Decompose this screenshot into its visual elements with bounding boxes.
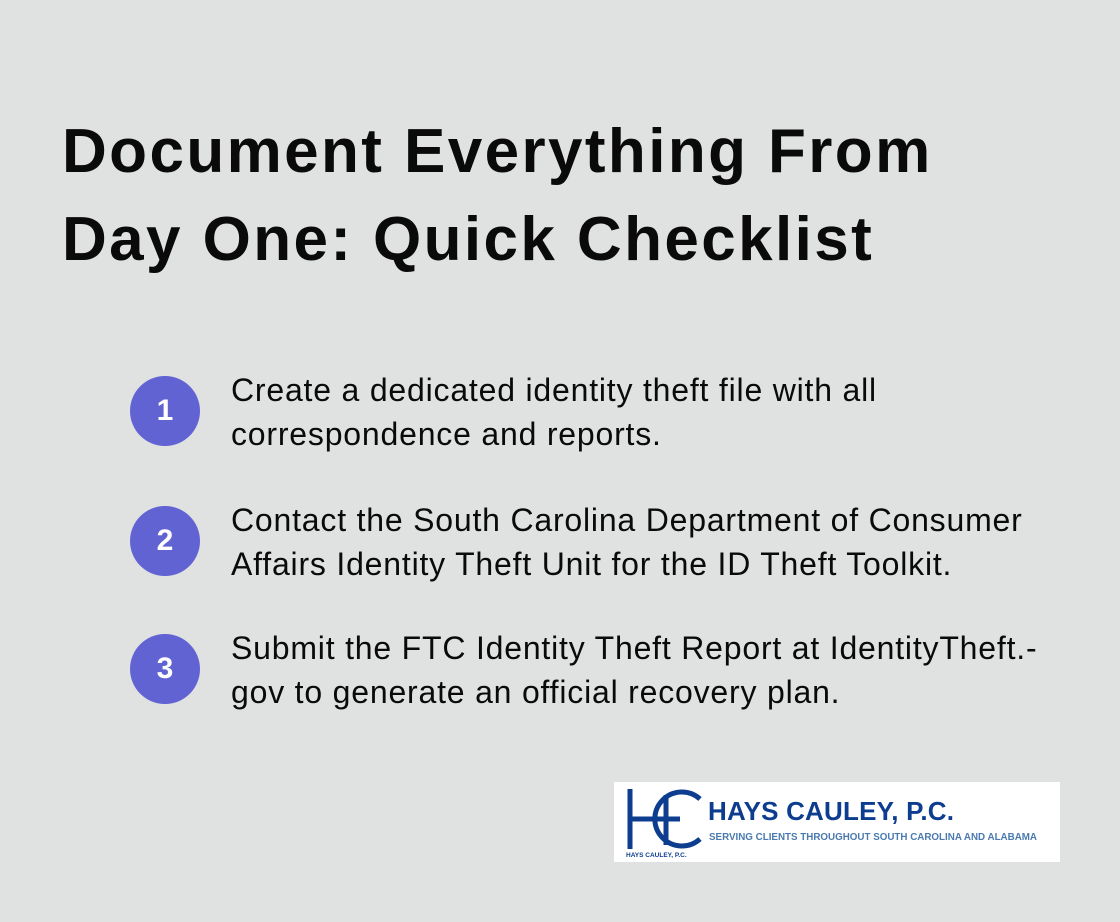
item 2: [130, 502, 1023, 582]
number badge 1: 1: [157, 394, 173, 427]
logo small text: HAYS CAULEY, P.C.: [626, 852, 687, 859]
number badge 3: [130, 634, 200, 704]
item 1: [130, 372, 877, 452]
number badge 3: 3: [157, 652, 173, 685]
text 2: Contact the South Carolina Department of Consumer: [231, 502, 1023, 538]
text 2: [231, 502, 1023, 582]
text 1: [231, 372, 877, 452]
text 2: Affairs Identity Theft Unit for the ID Theft Toolkit.: [231, 546, 952, 582]
title: [62, 117, 933, 274]
text 1: correspondence and reports.: [231, 416, 662, 452]
title: Day One: Quick Checklist: [62, 205, 874, 274]
number badge 1: [130, 376, 200, 446]
text 3: gov to generate an official recovery plan.: [231, 674, 840, 710]
logo tagline: SERVING CLIENTS THROUGHOUT SOUTH CAROLINA AND ALABAMA: [709, 832, 1037, 843]
number badge 2: [130, 506, 200, 576]
text 1: Create a dedicated identity theft file with all: [231, 372, 877, 408]
logo: [614, 782, 1060, 862]
text 3: [231, 630, 1037, 710]
logo name: HAYS CAULEY, P.C.: [708, 796, 954, 826]
number badge 2: 2: [157, 524, 173, 557]
icon: HC monogram: [628, 789, 702, 849]
item 3: [130, 630, 1037, 710]
text 3: Submit the FTC Identity Theft Report at IdentityTheft.-: [231, 630, 1037, 666]
title: Document Everything From: [62, 117, 933, 186]
